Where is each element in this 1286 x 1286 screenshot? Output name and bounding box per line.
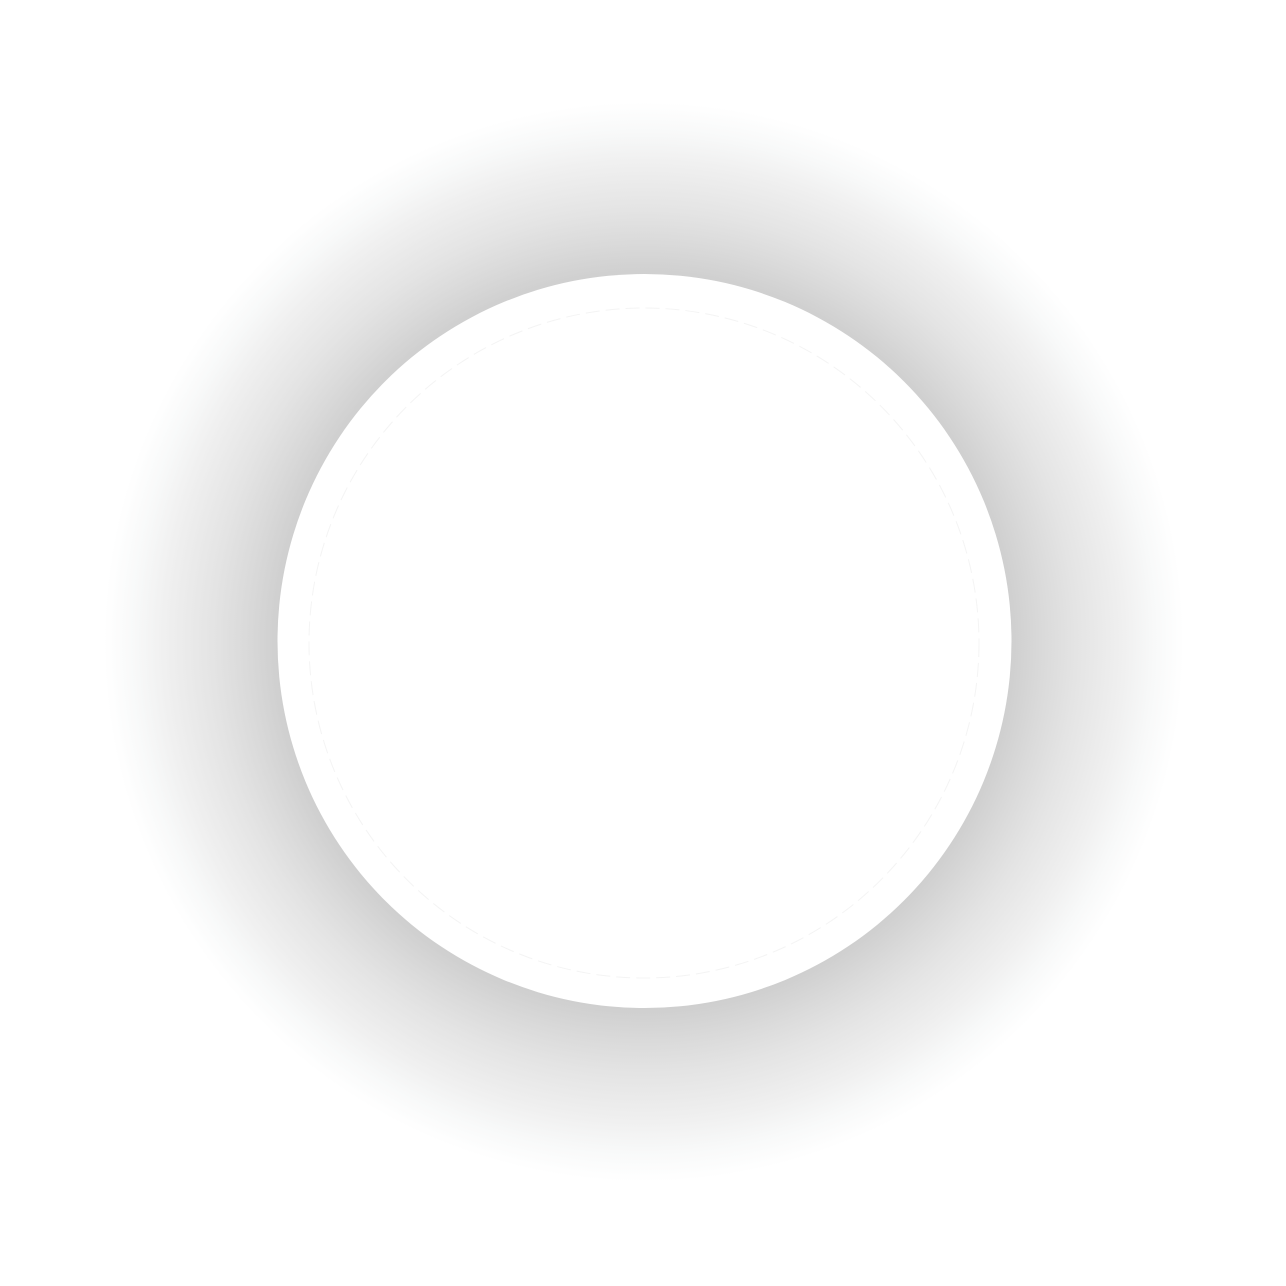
faint inner dashed ring: [309, 308, 979, 978]
soft grey shadow halo: [104, 102, 1184, 1182]
white outer disc: [278, 274, 1012, 1008]
